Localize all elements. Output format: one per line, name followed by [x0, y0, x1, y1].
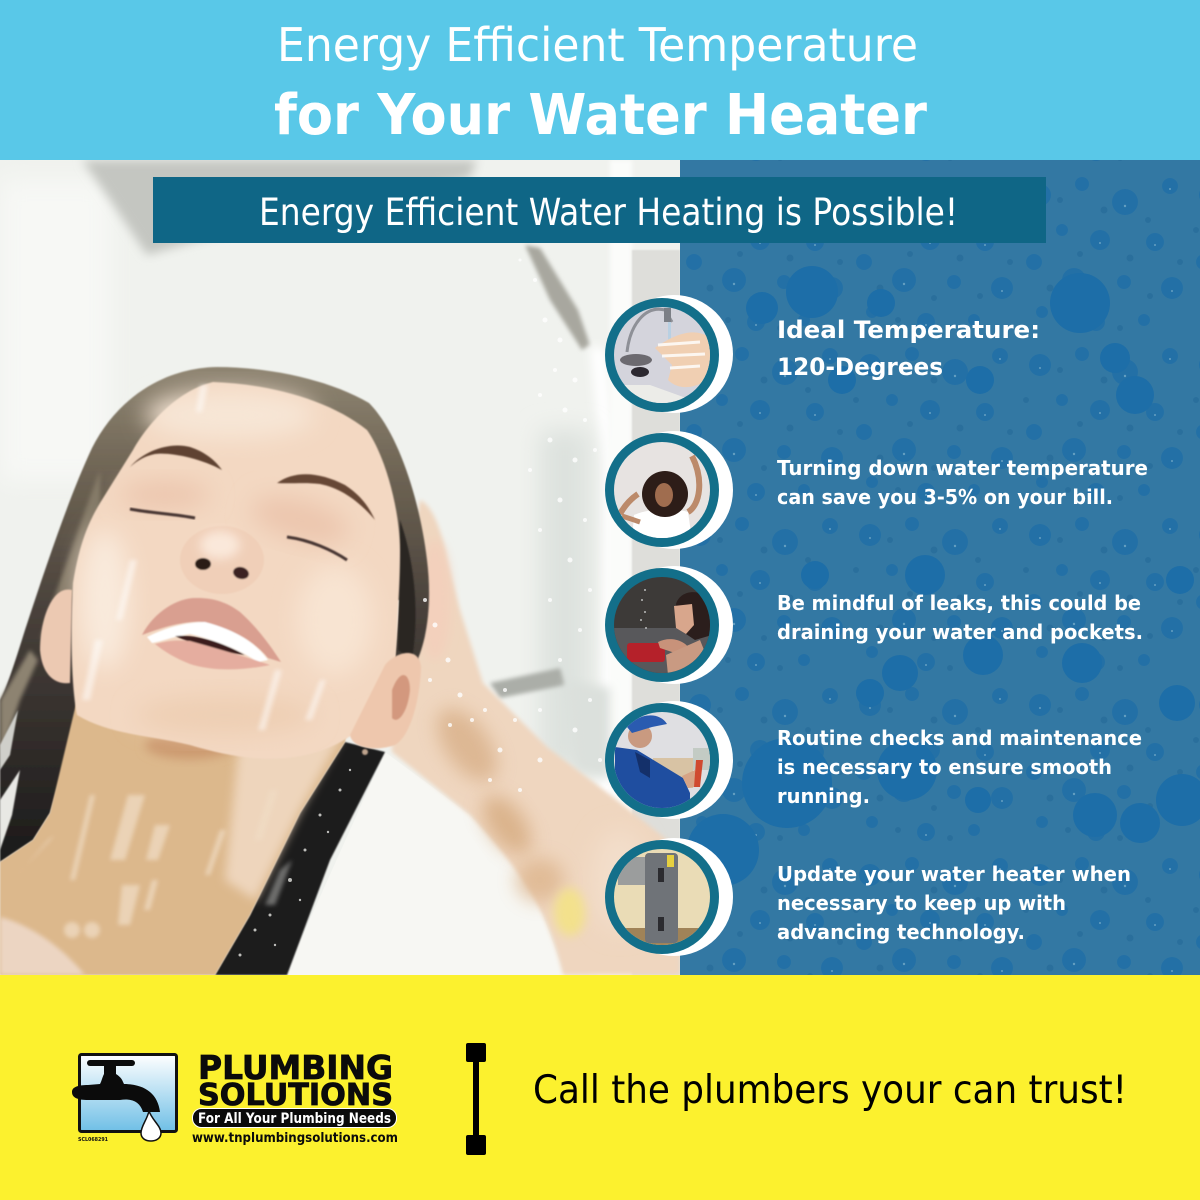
right hair strand [215, 742, 385, 975]
face [72, 382, 400, 759]
right eyebrow [277, 474, 375, 520]
license number: SCL068291 [78, 1137, 108, 1143]
nose [180, 532, 264, 594]
header band [0, 0, 1200, 160]
icon: faucet [72, 1054, 176, 1141]
tip 4: maintenance [605, 701, 1142, 819]
brand name: PLUMBING [198, 1048, 393, 1087]
icon: water heater photo [605, 838, 733, 956]
icon: woman catching leak photo [605, 566, 733, 684]
brand name line 2: SOLUTIONS [198, 1078, 393, 1113]
woman in shower [0, 258, 680, 975]
mouth [142, 598, 281, 669]
tip text: Ideal Temperature: [777, 316, 1040, 344]
tip text: Turning down water temperature [777, 456, 1148, 480]
subtitle banner: Energy Efficient Water Heating is Possible! [259, 191, 958, 234]
white wall below the arm [285, 752, 565, 975]
left eye [130, 509, 195, 518]
logo [72, 1048, 398, 1146]
footer band [0, 975, 1200, 1200]
shower spray [423, 258, 612, 792]
tip 1: ideal temperature [605, 295, 1040, 413]
title line 1: Energy Efficient Temperature [277, 18, 918, 72]
tip text: necessary to keep up with [777, 891, 1066, 915]
tip text: advancing technology. [777, 920, 1025, 944]
tip text: is necessary to ensure smooth [777, 755, 1112, 779]
neck [0, 700, 352, 975]
tip text: draining your water and pockets. [777, 620, 1143, 644]
tip text: can save you 3-5% on your bill. [777, 485, 1113, 509]
icon: hand washing photo [605, 295, 733, 413]
icon: plumber working photo [605, 701, 733, 819]
tip text: Be mindful of leaks, this could be [777, 591, 1141, 615]
left ear [40, 590, 72, 683]
panel: blue water droplet background [680, 160, 1200, 975]
tip text: 120-Degrees [777, 353, 943, 381]
call to action: Call the plumbers your can trust! [533, 1068, 1127, 1113]
tagline pill: For All Your Plumbing Needs [198, 1111, 391, 1127]
tip text: Routine checks and maintenance [777, 726, 1142, 750]
raised arm [390, 500, 680, 975]
tip 5: update water heater [605, 838, 1131, 956]
right eye [287, 537, 347, 560]
right ear [350, 653, 421, 755]
website: www.tnplumbingsolutions.com [192, 1131, 398, 1146]
panel: shower photo background [0, 160, 680, 975]
tip text: Update your water heater when [777, 862, 1131, 886]
tip 3: leaks [605, 566, 1143, 684]
left eyebrow [130, 446, 222, 470]
icon: happy woman stretching photo [605, 431, 733, 549]
subtitle banner [153, 177, 1046, 243]
title line 2: for Your Water Heater [274, 83, 927, 148]
tip text: running. [777, 784, 870, 808]
water on face [82, 385, 326, 730]
divider [466, 1043, 486, 1155]
tip 2: savings [605, 431, 1148, 549]
hair [0, 367, 429, 862]
